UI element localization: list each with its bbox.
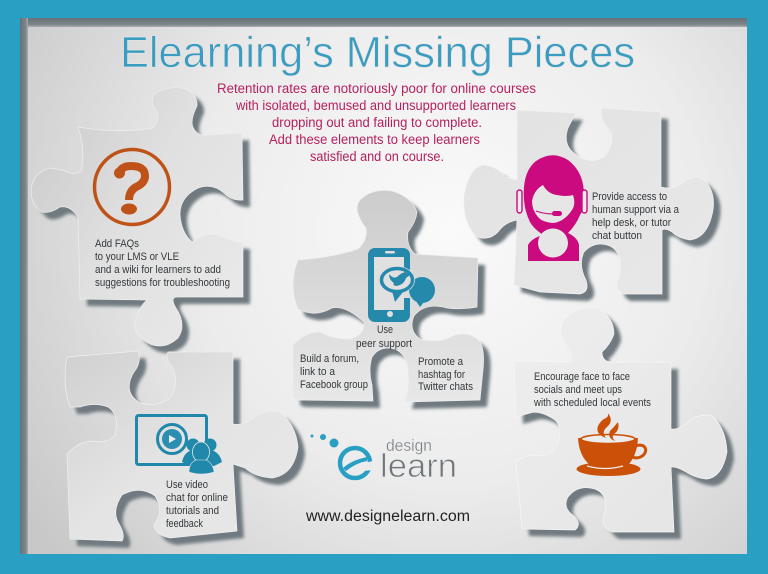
video chat text [166,479,228,530]
peer support text: peer support [356,338,412,350]
panel: FAQ puzzle piece [31,88,250,353]
forum text: link to a [300,366,336,378]
intro text [217,81,536,164]
face to face text: socials and meet ups [534,384,622,396]
video chat text: chat for online [166,492,228,504]
intro text: with isolated, bemused and unsupported learners [235,98,516,113]
face to face text: Encourage face to face [534,371,630,383]
video chat text: feedback [166,518,203,530]
FAQ text: suggestions for troubleshooting [95,277,230,289]
icon: phone with chat bubbles [368,248,435,322]
hashtag text: Promote a [418,356,464,368]
face to face text [533,371,651,409]
panel: video chat puzzle piece [65,351,305,548]
intro text: Retention rates are notoriously poor for online courses [217,81,536,96]
human support text: help desk, or tutor [592,217,671,229]
video chat text: Use video [166,479,208,491]
forum text: Build a forum, [300,353,359,365]
logo: design elearn: design [386,436,432,455]
human support text: Provide access to [592,191,667,203]
intro text: dropping out and failing to complete. [272,115,482,130]
logo: design elearn [310,434,457,484]
logo: design elearn: learn [380,447,457,484]
video chat text: tutorials and [166,505,219,517]
FAQ text: Add FAQs [95,238,139,250]
peer support text: Use [377,324,393,336]
forum text: Facebook group [300,379,368,391]
face to face text: with scheduled local events [533,397,651,409]
icon: headset agent [517,155,587,261]
hashtag text: hashtag for [418,369,465,381]
hashtag text: Twitter chats [418,381,473,393]
FAQ text: and a wiki for learners to add [95,264,221,276]
intro text: Add these elements to keep learners [269,132,480,147]
human support text: human support via a [592,204,680,216]
FAQ text [95,238,230,289]
icon: video chat screen [136,416,222,474]
FAQ text: to your LMS or VLE [95,251,179,263]
intro text: satisfied and on course. [310,149,444,164]
forum text [300,353,368,391]
hashtag text [418,356,473,393]
icon: coffee cup [576,413,648,476]
panel: face to face puzzle piece [514,307,734,539]
icon: question mark [94,150,170,224]
website url: www.designelearn.com [305,508,470,525]
human support text: chat button [592,230,642,242]
panel: human support puzzle piece [464,108,721,301]
human support text [592,191,680,242]
panel: peer support puzzle piece [293,190,491,409]
peer support text [356,324,412,350]
title: Elearning’s Missing Pieces [120,28,635,77]
